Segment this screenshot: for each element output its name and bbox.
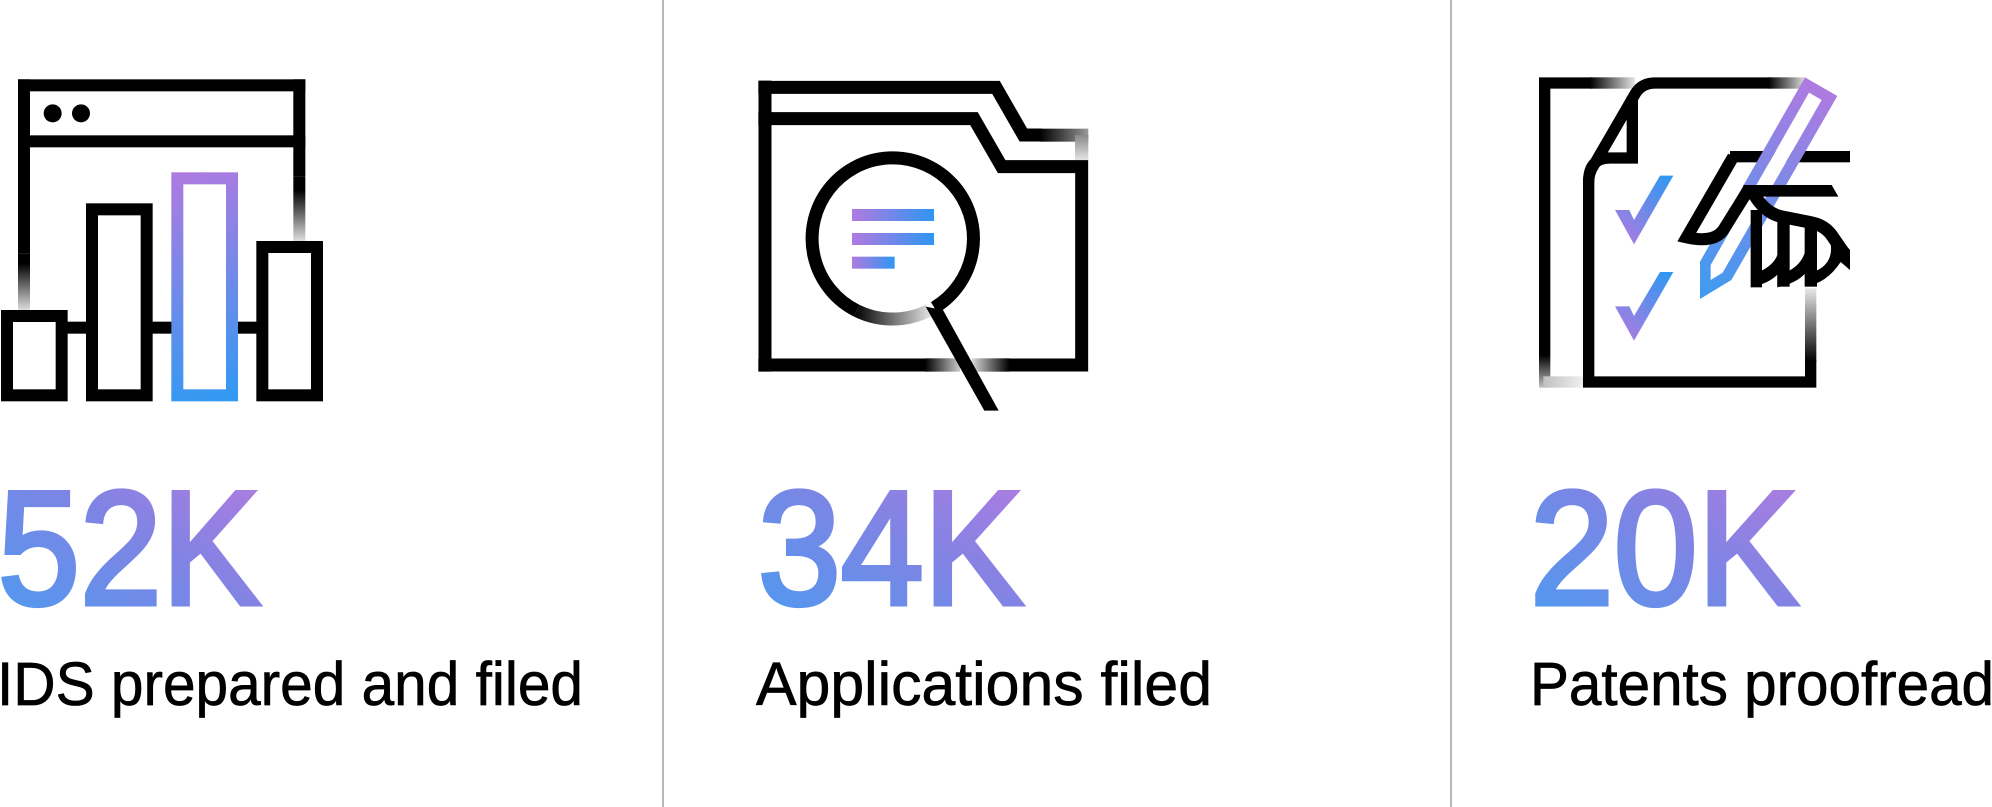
icon: document with checks and hand holding pen	[1539, 77, 1860, 388]
stat: 20K: 20K	[1530, 458, 1798, 639]
stat: 34K: 34K	[758, 458, 1023, 639]
label: IDS prepared and filed: IDS prepared and filed	[0, 650, 583, 718]
panel: IDS prepared and filed	[0, 79, 583, 718]
panel: Patents proofread	[1530, 77, 1992, 718]
divider left	[662, 0, 664, 807]
stat: 52K: 52K	[0, 458, 260, 639]
label: Applications filed: Applications filed	[756, 650, 1212, 718]
icon: folder with magnifier	[758, 81, 1088, 411]
icon: browser window with bar chart	[7, 79, 317, 395]
panel: Applications filed	[756, 81, 1212, 718]
divider right	[1450, 0, 1452, 807]
